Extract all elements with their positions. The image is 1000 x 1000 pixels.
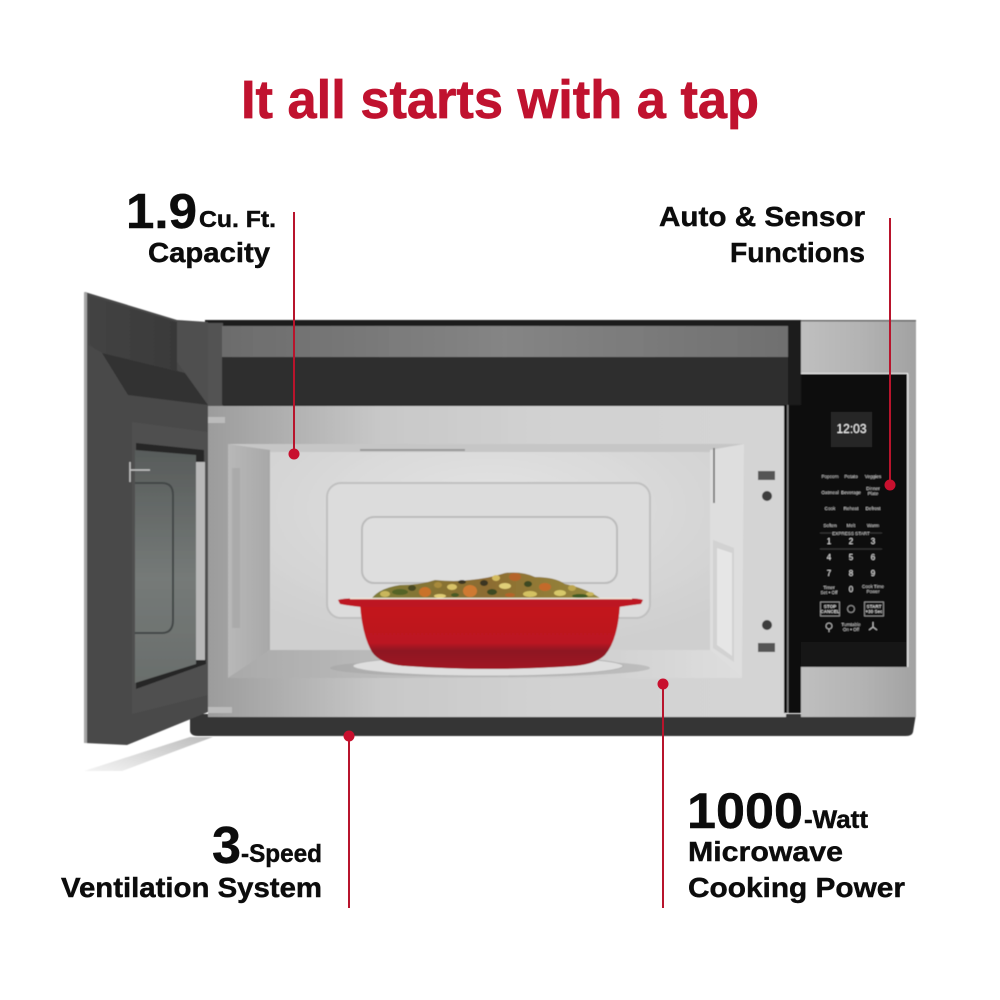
power leader dot	[658, 678, 668, 690]
functions label: Auto & Sensor	[659, 201, 865, 232]
top rim	[228, 444, 744, 452]
ceiling cable	[713, 448, 715, 503]
functions leader line	[889, 218, 891, 485]
left wall	[228, 444, 270, 678]
right side latch slots	[758, 471, 775, 652]
wattage unit: -Watt	[804, 806, 869, 834]
door body	[85, 292, 208, 745]
function keys: Veggies	[865, 474, 882, 479]
number keys: Set • Off	[820, 590, 838, 595]
door latch	[130, 462, 150, 482]
door shadow	[84, 737, 213, 771]
callout: cooking power: Cooking Power	[688, 872, 905, 903]
ventilation label: Ventilation System	[61, 872, 322, 903]
dish rim	[338, 598, 643, 607]
window inner outline	[135, 483, 173, 633]
capacity label: Capacity	[148, 237, 270, 268]
function keys: Plate	[868, 491, 879, 496]
window surround	[132, 422, 208, 714]
ventilation leader line	[348, 736, 350, 908]
window white bar	[196, 462, 205, 660]
casserole dish with food	[338, 572, 643, 669]
floor	[228, 650, 742, 678]
callout: auto and sensor functions: Functions	[730, 237, 865, 268]
callout: capacity	[126, 185, 300, 460]
stop cancel and start keys: START	[867, 604, 882, 609]
window glass	[135, 450, 196, 683]
ventilation leader dot	[344, 730, 354, 742]
capacity leader dot	[288, 448, 300, 460]
callout: cooking power	[658, 678, 905, 908]
number keys: Cook Time	[862, 584, 884, 589]
door middle dark facet	[102, 353, 208, 405]
capacity number: 1.9	[126, 185, 197, 239]
function keys: Defrost	[866, 506, 881, 511]
function keys	[820, 474, 882, 549]
ventilation speed: -Speed	[241, 840, 322, 868]
wave guide inner panel	[362, 517, 617, 583]
function keys: Warm	[867, 523, 879, 528]
wave guide outer panel	[327, 483, 650, 618]
window dark frame	[136, 443, 206, 689]
number keys: 2	[849, 537, 854, 546]
hinge column	[177, 322, 208, 405]
number keys: 9	[871, 569, 876, 578]
wattage number: 1000	[687, 783, 803, 839]
power label: Microwave	[688, 836, 843, 867]
function keys: EXPRESS START	[832, 531, 870, 536]
function keys: Popcorn	[821, 474, 839, 479]
function keys: Dinner	[866, 486, 880, 491]
title: It all starts with a tap	[241, 70, 759, 130]
power leader line	[662, 684, 664, 908]
light, turntable and fan keys: Turntable	[841, 622, 861, 627]
hinges	[208, 417, 232, 713]
number keys: 3	[871, 537, 876, 546]
number keys: 5	[849, 553, 854, 562]
function keys: Reheat	[844, 506, 859, 511]
control panel	[801, 374, 907, 667]
number keys: 8	[849, 569, 854, 578]
upper cabinet band	[205, 320, 801, 406]
food line on rim	[350, 598, 632, 600]
turntable	[330, 656, 650, 677]
stop cancel and start keys: CANCEL	[820, 609, 840, 614]
number keys: Timer	[823, 585, 835, 590]
door edge	[84, 292, 87, 743]
clock display	[831, 412, 872, 447]
right wall	[710, 444, 744, 678]
back wall	[265, 446, 715, 652]
cavity interior	[228, 444, 775, 678]
number keys: 4	[827, 553, 832, 562]
number keys: 6	[871, 553, 876, 562]
ceiling details	[360, 449, 465, 451]
clock display: 12:03	[836, 421, 866, 436]
ventilation number: 3	[212, 817, 241, 875]
light, turntable and fan keys	[826, 622, 877, 632]
function keys: Melt	[847, 523, 856, 528]
stop cancel and start keys: STOP	[824, 604, 836, 609]
dish body	[360, 604, 620, 669]
right wall recess	[713, 540, 734, 662]
capacity unit: Cu. Ft.	[199, 206, 276, 232]
number keys: 1	[827, 537, 832, 546]
callout: ventilation	[61, 730, 354, 908]
open door	[84, 292, 232, 745]
number keys: 7	[827, 569, 832, 578]
stainless control panel surround	[801, 320, 916, 717]
stop cancel and start keys	[820, 602, 884, 616]
left wall vents	[232, 468, 240, 628]
function keys: Cook	[825, 506, 836, 511]
light, turntable and fan keys: On • Off	[843, 627, 860, 632]
food	[372, 572, 600, 598]
functions leader dot	[884, 480, 896, 490]
microwave	[84, 292, 916, 771]
function keys: Soften	[823, 523, 837, 528]
number keys: Power	[866, 589, 880, 594]
number keys: 0	[849, 585, 854, 594]
bottom vent bar	[190, 714, 916, 736]
capacity leader line	[293, 212, 295, 454]
cavity frame	[208, 406, 786, 717]
function keys: Potato	[844, 474, 858, 479]
number keys	[820, 537, 884, 595]
function keys: Beverage	[841, 490, 861, 495]
function keys: Oatmeal	[821, 490, 839, 495]
stop cancel and start keys: +30 Sec	[865, 609, 883, 614]
door upper facet	[88, 295, 208, 405]
door-side black frame	[784, 405, 801, 713]
callout: auto and sensor functions	[659, 201, 896, 490]
